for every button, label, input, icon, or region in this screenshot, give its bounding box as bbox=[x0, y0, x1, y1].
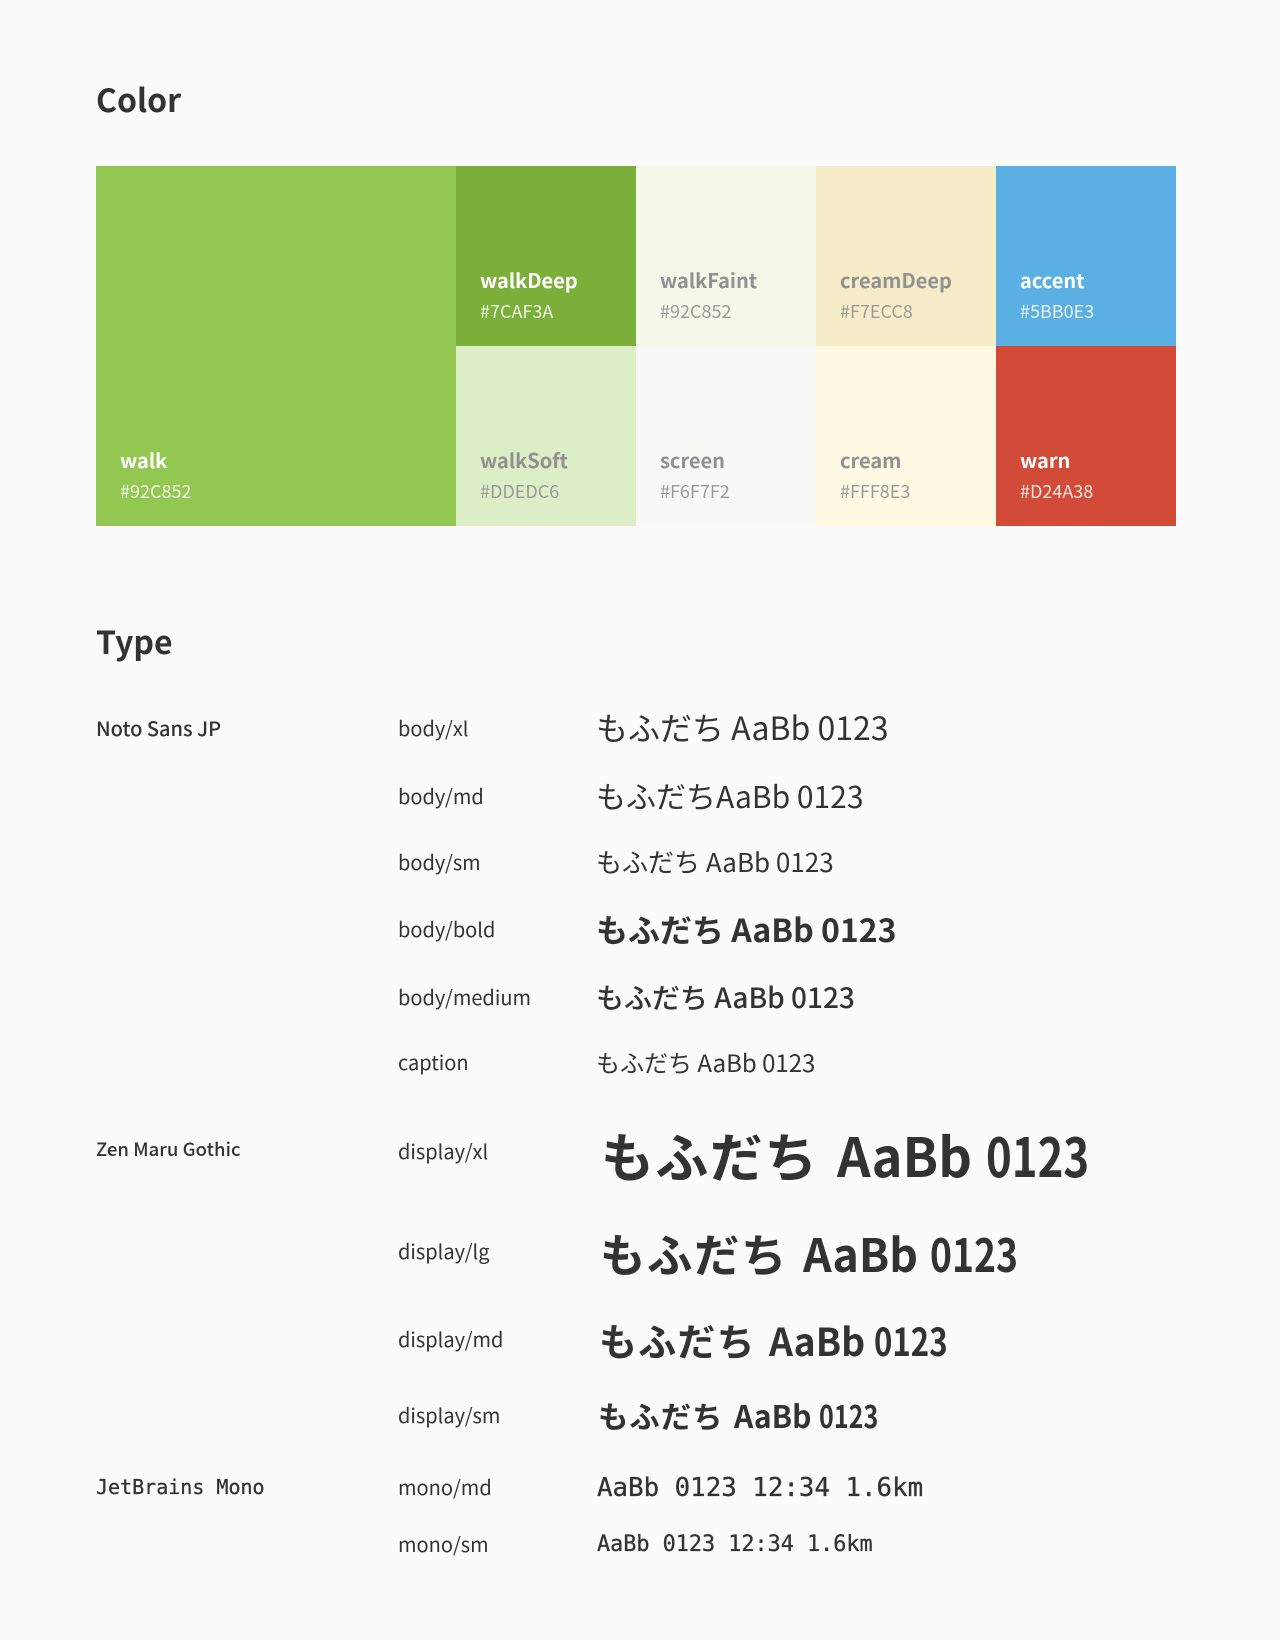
row label: display/xl: display/xl bbox=[398, 1136, 488, 1165]
sample: display/lg: もふだち bbox=[600, 1220, 788, 1286]
sample: display/lg: AaBb bbox=[803, 1220, 918, 1286]
swatch: screen bbox=[636, 346, 816, 526]
row label: body/medium: body/medium bbox=[398, 982, 531, 1011]
sample: display/sm: もふだち bbox=[598, 1393, 724, 1437]
sample: display/sm: AaBb bbox=[734, 1392, 812, 1437]
sample: body/sm: もふだち AaBb 0123 bbox=[596, 843, 834, 880]
row label: body/xl: body/xl bbox=[398, 713, 468, 742]
swatch: creamDeep: #F7ECC8 bbox=[840, 298, 913, 324]
sample: display/lg bbox=[600, 1220, 1018, 1286]
row label: caption: caption bbox=[398, 1047, 469, 1076]
swatch: creamDeep bbox=[816, 166, 996, 346]
sample: mono/md: AaBb 0123 12:34 1.6km bbox=[597, 1473, 923, 1503]
swatch: screen: #F6F7F2 bbox=[660, 478, 730, 504]
sample: display/lg: 0123 bbox=[930, 1220, 1018, 1286]
sample: body/xl: もふだち AaBb 0123 bbox=[596, 704, 888, 750]
swatch: cream bbox=[816, 346, 996, 526]
heading: Color: Color bbox=[96, 76, 181, 122]
swatch: accent: accent bbox=[1020, 265, 1085, 294]
swatch: walkDeep: walkDeep bbox=[480, 265, 578, 294]
swatch: accent: #5BB0E3 bbox=[1020, 298, 1094, 324]
sample: display/md: AaBb bbox=[769, 1312, 865, 1368]
swatch: walkSoft: walkSoft bbox=[480, 445, 568, 474]
row label: display/lg: display/lg bbox=[398, 1236, 490, 1265]
panel: color swatches bbox=[96, 166, 1176, 526]
family label: JetBrains Mono: JetBrains Mono bbox=[96, 1475, 265, 1499]
swatch: walkFaint: #92C852 bbox=[660, 298, 731, 324]
sample: display/md: 0123 bbox=[874, 1312, 948, 1368]
swatch: warn: warn bbox=[1020, 445, 1070, 474]
sample: display/xl bbox=[601, 1114, 1089, 1193]
sample: display/sm: 0123 bbox=[819, 1392, 878, 1437]
swatch: creamDeep: creamDeep bbox=[840, 265, 952, 294]
swatch: walk: walk bbox=[120, 445, 167, 474]
swatch: cream: #FFF8E3 bbox=[840, 478, 910, 504]
sample: body/bold: もふだち AaBb 0123 bbox=[596, 906, 896, 952]
sample: display/sm bbox=[598, 1392, 878, 1437]
swatch: walkDeep: #7CAF3A bbox=[480, 298, 553, 324]
swatch: walkFaint bbox=[636, 166, 816, 346]
sample: body/md: もふだちAaBb 0123 bbox=[596, 773, 863, 817]
sample: display/xl: 0123 bbox=[986, 1114, 1089, 1193]
sample: caption: もふだち AaBb 0123 bbox=[596, 1044, 815, 1079]
swatch: walkSoft: #DDEDC6 bbox=[480, 478, 559, 504]
swatch: accent bbox=[996, 166, 1176, 346]
sample: mono/sm: AaBb 0123 12:34 1.6km bbox=[597, 1532, 873, 1557]
sample: display/xl: もふだち bbox=[601, 1117, 819, 1193]
family label: Noto Sans JP: Noto Sans JP bbox=[96, 713, 221, 742]
swatch: cream: cream bbox=[840, 445, 901, 474]
row label: display/md: display/md bbox=[398, 1324, 503, 1353]
sample: body/medium: もふだち AaBb 0123 bbox=[596, 977, 855, 1017]
row label: body/sm: body/sm bbox=[398, 847, 481, 876]
family label: Zen Maru Gothic: Zen Maru Gothic bbox=[96, 1136, 241, 1162]
sample: display/md: もふだち bbox=[599, 1312, 756, 1367]
row label: mono/md: mono/md bbox=[398, 1472, 492, 1501]
swatch: walk: #92C852 bbox=[120, 478, 191, 504]
swatch: screen: screen bbox=[660, 445, 725, 474]
swatch: walkSoft bbox=[456, 346, 636, 526]
swatch: walkFaint: walkFaint bbox=[660, 265, 757, 294]
swatch: walk bbox=[96, 166, 456, 526]
sample: display/xl: AaBb bbox=[837, 1114, 972, 1193]
row label: mono/sm: mono/sm bbox=[398, 1529, 489, 1558]
sample: display/md bbox=[599, 1312, 948, 1368]
row label: display/sm: display/sm bbox=[398, 1400, 500, 1429]
row label: body/bold: body/bold bbox=[398, 914, 495, 943]
swatch: warn bbox=[996, 346, 1176, 526]
swatch: warn: #D24A38 bbox=[1020, 478, 1093, 504]
heading: Type: Type bbox=[96, 618, 173, 664]
swatch: walkDeep bbox=[456, 166, 636, 346]
row label: body/md: body/md bbox=[398, 781, 484, 810]
